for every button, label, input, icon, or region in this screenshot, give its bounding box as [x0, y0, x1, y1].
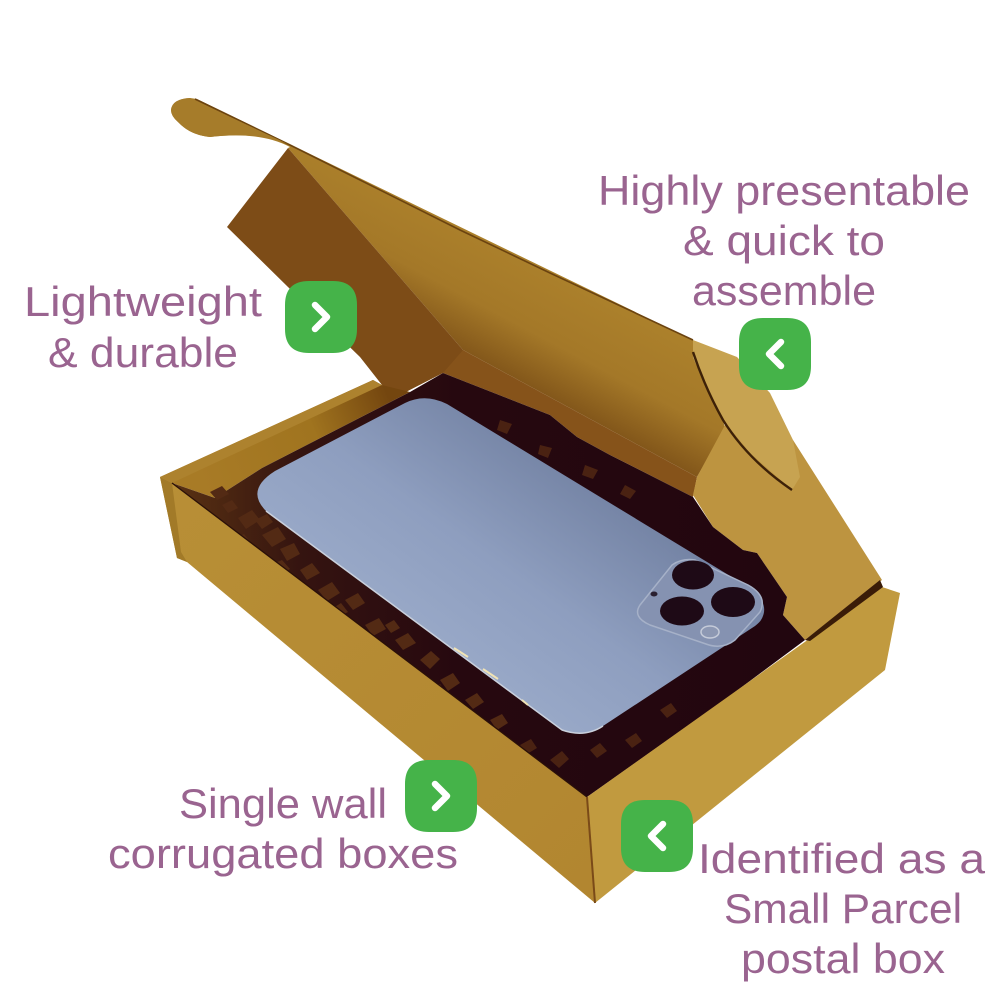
- label text: [698, 835, 986, 982]
- callout: highly presentable: [598, 167, 970, 390]
- packing floor: [172, 373, 805, 797]
- label text: Small Parcel: [724, 885, 962, 932]
- label text: postal box: [741, 935, 945, 982]
- lens one: [672, 560, 714, 590]
- flash: [650, 592, 658, 596]
- icon: left chevron badge: [621, 800, 693, 872]
- dark paper flecks near back: [497, 420, 677, 768]
- back wall strip: [443, 350, 697, 497]
- microphone: [701, 626, 719, 638]
- icon: right chevron badge: [405, 760, 477, 832]
- charging slots: [454, 648, 528, 705]
- label text: & durable: [48, 329, 238, 376]
- right side panel: [693, 425, 882, 640]
- front right wall: [587, 587, 900, 903]
- label text: Identified as a: [698, 835, 986, 882]
- lens three: [711, 587, 755, 617]
- tuck cut line: [693, 352, 792, 490]
- lens two: [660, 596, 704, 626]
- label text: assemble: [692, 267, 876, 314]
- label text: [598, 167, 970, 314]
- front left wall: [160, 477, 595, 903]
- inner side flap: [227, 148, 470, 395]
- left back wall: [160, 380, 410, 498]
- cardboard box with phone: [160, 98, 900, 903]
- icon: right chevron badge: [285, 281, 357, 353]
- label text: Lightweight: [24, 278, 262, 325]
- callout: single wall corrugated: [108, 760, 477, 877]
- icon: left chevron badge: [739, 318, 811, 390]
- phone: [257, 398, 764, 733]
- label text: & quick to: [683, 217, 885, 264]
- label text: [24, 278, 262, 376]
- label text: corrugated boxes: [108, 830, 458, 877]
- label text: Highly presentable: [598, 167, 970, 214]
- label text: [108, 780, 458, 877]
- shredded paper: [210, 486, 508, 730]
- label text: Single wall: [179, 780, 387, 827]
- camera bump: [638, 560, 762, 646]
- box lid interior: [171, 98, 725, 477]
- tuck flap: [693, 340, 800, 490]
- callout: small parcel postal box: [621, 800, 986, 982]
- callout: lightweight and durable: [24, 278, 357, 376]
